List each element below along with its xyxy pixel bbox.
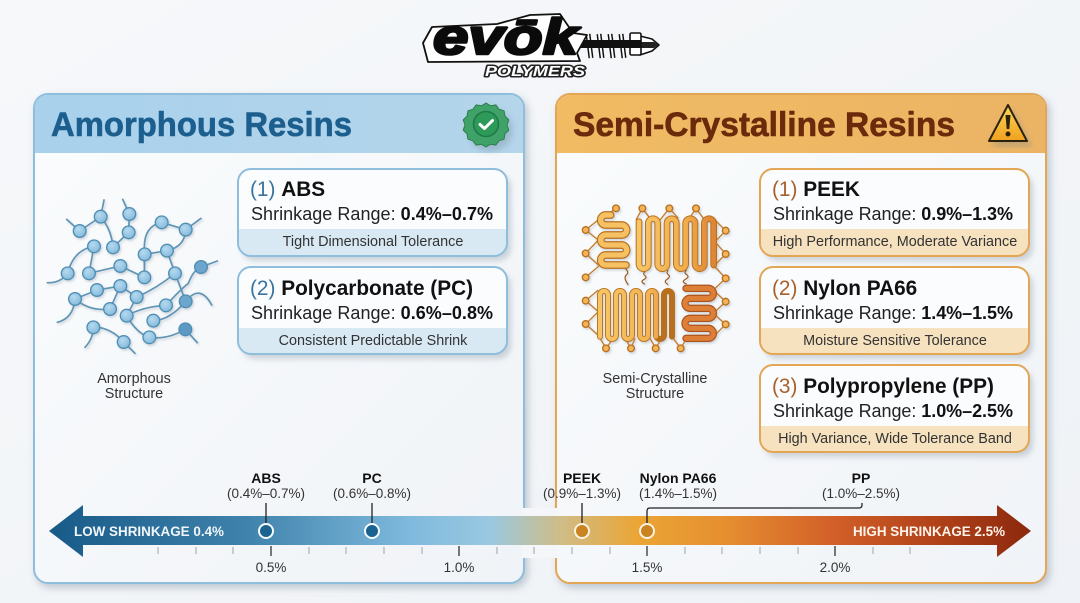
marker: ABS: ABS: [251, 470, 281, 486]
marker: PC: (0.6%–0.8%): [333, 486, 411, 501]
card: Polycarbonate: Shrinkage Range: 0.6%–0.8%: [251, 303, 493, 323]
card: Polypropylene: [760, 365, 1029, 452]
serpentine C: [600, 291, 672, 339]
gradient arrow bar: [49, 505, 1031, 557]
panel: amorphous resins: [34, 94, 524, 583]
label: semi-crystalline structure: Structure: [626, 386, 684, 402]
logo: evok polymers: [423, 9, 659, 80]
marker: PC: PC: [362, 470, 382, 486]
marker: PC: [333, 470, 411, 538]
axis labels: 1.5%: [632, 560, 662, 575]
chart: amorphous molecule structure: [47, 199, 217, 353]
logo subtitle: POLYMERS: [485, 63, 585, 80]
panel header band: [35, 95, 523, 153]
axis labels: 2.0%: [820, 560, 850, 575]
label: amorphous structure: Structure: [105, 386, 163, 402]
panel: semi-crystalline resins: [556, 94, 1046, 583]
marker: ABS: [227, 470, 305, 538]
chart: semi-crystalline molecule structure: [582, 205, 729, 352]
marker: Nylon PA66: [639, 470, 862, 538]
card: ABS: Tight Dimensional Tolerance: [283, 234, 463, 250]
card: Nylon PA66: Moisture Sensitive Tolerance: [803, 333, 987, 349]
card: Polycarbonate: Consistent Predictable Shrink: [279, 333, 468, 349]
heading: amorphous resins: Amorphous Resins: [51, 106, 352, 144]
panel background: [556, 94, 1046, 583]
card: PEEK: Shrinkage Range: 0.9%–1.3%: [773, 204, 1013, 224]
icon: green check badge: [463, 103, 509, 147]
card: PEEK: [760, 169, 1029, 256]
panel header band: [557, 95, 1045, 153]
label: amorphous structure: Amorphous: [97, 371, 171, 387]
marker label: PP: (1.0%–2.5%): [822, 486, 900, 501]
scale connector strip: [522, 508, 558, 558]
card: Polycarbonate: [238, 267, 507, 354]
high shrinkage label: HIGH SHRINKAGE 2.5%: [853, 524, 1005, 539]
serpentine B: [639, 219, 714, 269]
marker: Nylon PA66: (1.4%–1.5%): [639, 486, 717, 501]
logo screw icon: [572, 33, 659, 58]
serpentine D: [685, 288, 713, 338]
shrinkage scale: [49, 470, 1031, 575]
card: Nylon PA66: (2) Nylon PA66: [772, 277, 917, 300]
heading: semi-crystalline resins: Semi-Crystalline Resins: [573, 106, 955, 144]
marker: PEEK: (0.9%–1.3%): [543, 486, 621, 501]
logo wordmark: evōk: [433, 9, 581, 65]
axis labels: 0.5%: [256, 560, 286, 575]
marker label: PP: [822, 470, 900, 501]
card: Nylon PA66: Shrinkage Range: 1.4%–1.5%: [773, 303, 1013, 323]
card: PEEK: (1) PEEK: [772, 178, 860, 201]
marker: Nylon PA66: Nylon PA66: [640, 470, 717, 486]
card: Polypropylene: Shrinkage Range: 1.0%–2.5%: [773, 401, 1013, 421]
card: Polypropylene: (3) Polypropylene (PP): [772, 375, 994, 398]
marker label: PP: PP: [852, 470, 870, 486]
card: ABS: [238, 169, 507, 256]
axis labels: [256, 560, 850, 575]
card: Polypropylene: High Variance, Wide Tolerance Band: [778, 431, 1012, 447]
logo backing outline: [423, 14, 587, 62]
card: Nylon PA66: [760, 267, 1029, 354]
marker: ABS: (0.4%–0.7%): [227, 486, 305, 501]
serpentine A: [601, 215, 627, 265]
card: ABS: (1) ABS: [250, 178, 325, 201]
icon: warning triangle: [989, 105, 1027, 141]
axis ticks: [158, 546, 910, 556]
marker: PEEK: PEEK: [563, 470, 601, 486]
marker: PEEK: [543, 470, 621, 538]
label: semi-crystalline structure: Semi-Crystalline: [603, 371, 707, 387]
axis labels: 1.0%: [444, 560, 474, 575]
card: Polycarbonate: (2) Polycarbonate (PC): [250, 277, 473, 300]
card: PEEK: High Performance, Moderate Variance: [773, 234, 1017, 250]
card: ABS: Shrinkage Range: 0.4%–0.7%: [251, 204, 493, 224]
panel background: [34, 94, 524, 583]
low shrinkage label: LOW SHRINKAGE 0.4%: [74, 524, 224, 539]
